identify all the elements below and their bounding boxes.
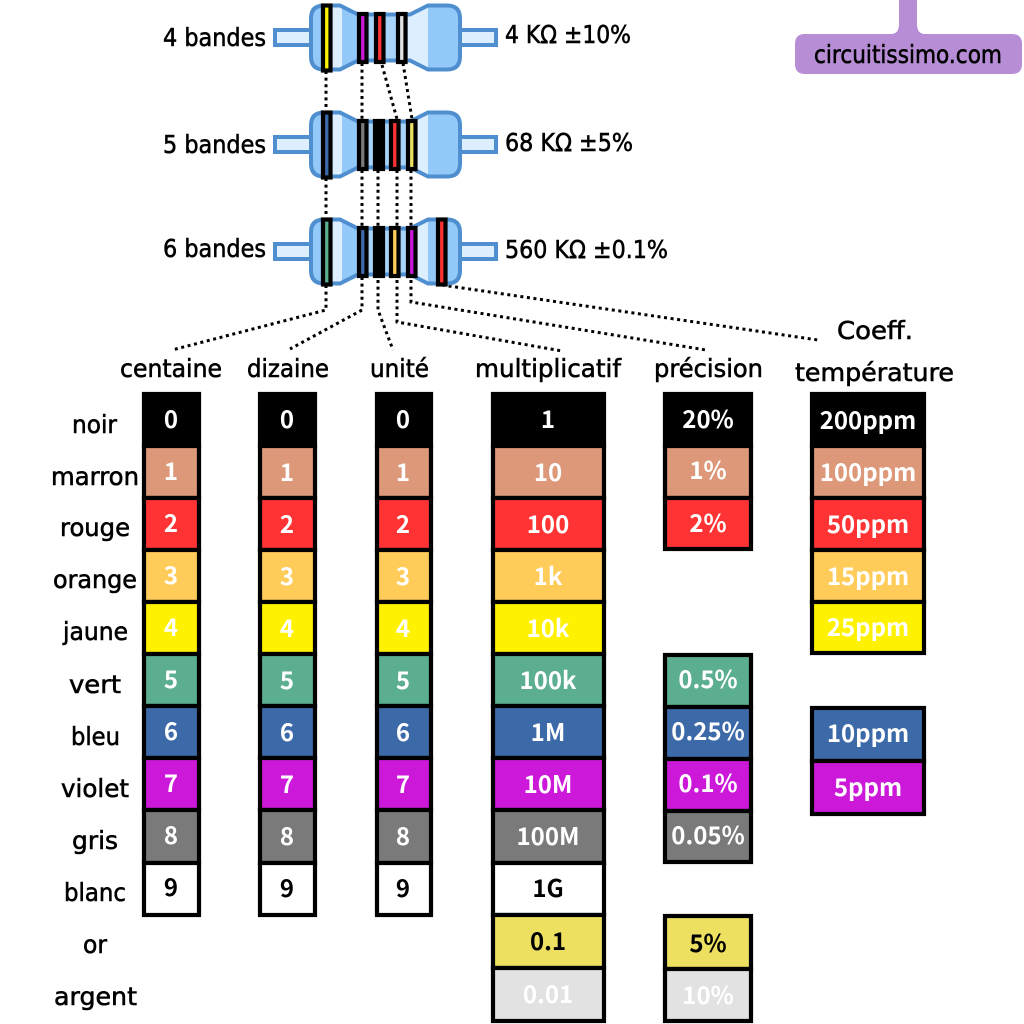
column: multiplicatif: 1 bbox=[541, 400, 555, 435]
column: centaine: 1 bbox=[164, 452, 178, 487]
column: précision: 2% bbox=[689, 504, 727, 539]
column: précision: 20% bbox=[682, 400, 734, 435]
column: coefficient de température: 10ppm bbox=[827, 714, 909, 749]
column: unité: 8 bbox=[396, 817, 410, 852]
colour names column: blanc bbox=[64, 878, 126, 907]
colour names column: argent bbox=[54, 982, 137, 1011]
heading: dizaine: dizaine bbox=[247, 354, 329, 383]
column: multiplicatif: 1G bbox=[532, 869, 564, 904]
column: coefficient de température: 100ppm bbox=[820, 453, 916, 488]
colour names column: bleu bbox=[71, 722, 120, 751]
column: précision bbox=[665, 394, 751, 1021]
heading: centaine: centaine bbox=[120, 354, 222, 383]
resistor label: 6 bandes: 6 bandes bbox=[163, 234, 266, 263]
column: centaine: 3 bbox=[164, 556, 178, 591]
colour names column: violet bbox=[61, 774, 129, 803]
column: dizaine: 5 bbox=[280, 661, 294, 696]
column: dizaine: 1 bbox=[280, 453, 294, 488]
column: multiplicatif: 10 bbox=[534, 453, 562, 488]
column: multiplicatif: 1M bbox=[531, 713, 565, 748]
column: coefficient de température: 25ppm bbox=[827, 608, 909, 643]
column: centaine: 6 bbox=[164, 712, 178, 747]
column: centaine: 4 bbox=[164, 608, 178, 643]
heading: précision: précision bbox=[654, 354, 763, 383]
column: coefficient de température bbox=[812, 394, 924, 814]
column: multiplicatif: 10k bbox=[527, 609, 570, 644]
colour names column: noir bbox=[72, 410, 118, 439]
resistor: 4 bandes bbox=[275, 0, 496, 78]
column: dizaine: 4 bbox=[280, 609, 294, 644]
column: dizaine: 6 bbox=[280, 713, 294, 748]
value: 560 kilo-ohm 0.1 percent: 560 KΩ ±0.1% bbox=[505, 235, 668, 264]
heading: Coeff. température bbox=[795, 316, 954, 387]
column: précision: 0.25% bbox=[671, 712, 745, 747]
logo tag: circuitissimo.com bbox=[795, 0, 1022, 74]
column: précision: 1% bbox=[689, 451, 727, 486]
column: coefficient de température: 15ppm bbox=[827, 557, 909, 592]
colour names column bbox=[51, 410, 139, 1011]
column: centaine: 0 bbox=[164, 400, 178, 435]
heading: multiplicatif: multiplicatif bbox=[475, 354, 622, 383]
column: centaine: 8 bbox=[164, 816, 178, 851]
column: multiplicatif: 100k bbox=[520, 661, 577, 696]
column: unité: 4 bbox=[396, 609, 410, 644]
colour names column: jaune bbox=[62, 617, 128, 646]
column: centaine bbox=[144, 394, 199, 915]
connector lines between resistors bbox=[172, 63, 818, 351]
column: unité: 3 bbox=[396, 557, 410, 592]
resistor label: 4 bandes: 4 bandes bbox=[163, 23, 266, 52]
column: centaine: 2 bbox=[164, 504, 178, 539]
heading: Coeff. température: Coeff. bbox=[837, 316, 913, 345]
column: centaine: 5 bbox=[164, 660, 178, 695]
value: 68 kilo-ohm 5 percent: 68 KΩ ±5% bbox=[505, 128, 633, 157]
column: dizaine: 0 bbox=[280, 400, 294, 435]
column: précision: 5% bbox=[689, 924, 727, 959]
column: unité: 0 bbox=[396, 400, 410, 435]
resistor: 5 bandes bbox=[275, 104, 496, 184]
colour names column: orange bbox=[53, 565, 137, 594]
column: dizaine: 7 bbox=[280, 765, 294, 800]
colour names column: rouge bbox=[60, 513, 130, 542]
column: multiplicatif: 0.01 bbox=[523, 975, 573, 1010]
column: unité: 9 bbox=[396, 869, 410, 904]
column: multiplicatif: 1k bbox=[534, 557, 563, 592]
column: précision: 0.5% bbox=[678, 660, 738, 695]
column: unité: 7 bbox=[396, 765, 410, 800]
column: unité: 6 bbox=[396, 713, 410, 748]
column: dizaine: 2 bbox=[280, 505, 294, 540]
column: précision: 10% bbox=[682, 976, 734, 1011]
value: 4 kilo-ohm 10 percent: 4 KΩ ±10% bbox=[505, 20, 631, 49]
colour names column: marron bbox=[51, 462, 139, 491]
heading: unité: unité bbox=[370, 354, 429, 383]
resistor: 6 bandes bbox=[275, 212, 496, 292]
column: multiplicatif: 100M bbox=[517, 817, 579, 852]
colour names column: gris bbox=[72, 826, 118, 855]
colour names column: vert bbox=[69, 670, 121, 699]
column: unité bbox=[377, 394, 431, 915]
resistor label: 5 bandes: 5 bandes bbox=[163, 130, 266, 159]
column: unité: 2 bbox=[396, 505, 410, 540]
column: dizaine: 8 bbox=[280, 817, 294, 852]
column: précision: 0.05% bbox=[671, 816, 745, 851]
column: centaine: 7 bbox=[164, 764, 178, 799]
column: multiplicatif: 100 bbox=[527, 505, 569, 540]
column: dizaine: 3 bbox=[280, 557, 294, 592]
heading: Coeff. température: température bbox=[795, 358, 954, 387]
column: multiplicatif bbox=[493, 394, 604, 1021]
column: centaine: 9 bbox=[164, 868, 178, 903]
column: coefficient de température: 200ppm bbox=[820, 401, 916, 436]
colour names column: or bbox=[83, 930, 108, 959]
column: unité: 5 bbox=[396, 661, 410, 696]
column: coefficient de température: 5ppm bbox=[834, 768, 902, 803]
column: multiplicatif: 0.1 bbox=[530, 922, 566, 957]
column: multiplicatif: 10M bbox=[524, 765, 572, 800]
column: unité: 1 bbox=[396, 453, 410, 488]
column: coefficient de température: 50ppm bbox=[827, 505, 909, 540]
column: dizaine: 9 bbox=[280, 869, 294, 904]
column: dizaine bbox=[260, 394, 315, 915]
column: précision: 0.1% bbox=[678, 764, 738, 799]
